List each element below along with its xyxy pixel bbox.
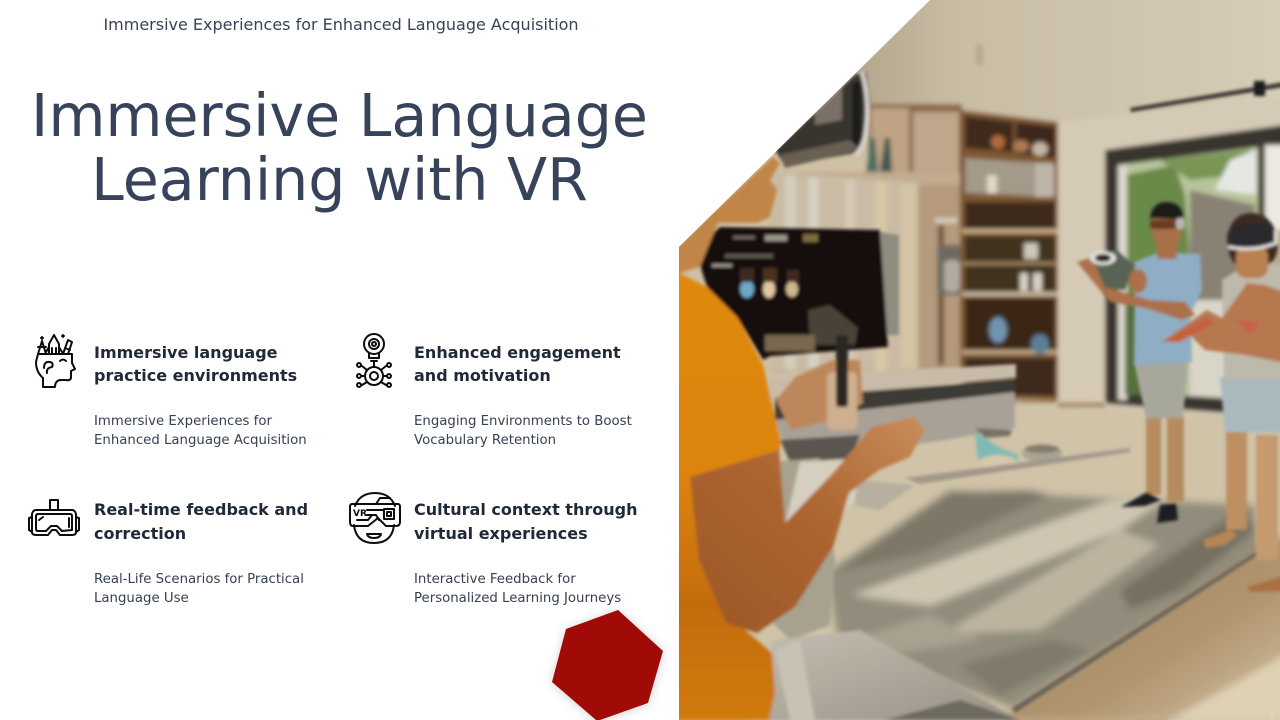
icon: face with circuit visor [349,492,401,544]
heading: virtual experiences [414,524,588,542]
panel: cultural context [349,492,637,606]
heading: Immersive language [94,343,278,362]
photo: VR language practice in a living room [679,0,1280,720]
heading [94,343,297,385]
description [94,572,304,606]
heading: Real-time feedback and [94,500,308,519]
panel: immersive environments [35,334,307,448]
floor and rug [745,400,1280,720]
heading [414,343,621,385]
description: Language Use [94,591,189,606]
description [414,572,621,606]
icon: head with creative tools [35,334,76,388]
heading [94,500,308,542]
panel: engagement and motivation [356,333,632,448]
description: Enhanced Language Acquisition [94,433,307,448]
heading: Cultural context through [414,500,637,519]
scene objects and people [660,72,1280,720]
room background [640,0,1280,720]
title [31,82,648,214]
icon: lightbulb gear and network [356,333,392,388]
icon: VR headset [28,499,80,536]
heading: Enhanced engagement [414,343,621,362]
description: Immersive Experiences for [94,414,272,429]
description: Real-Life Scenarios for Practical [94,572,304,587]
title: Learning with VR [91,146,588,214]
description [94,414,307,448]
description: Vocabulary Retention [414,433,556,448]
subtitle: Immersive Experiences for Enhanced Language Acquisition [103,15,579,34]
description: Interactive Feedback for [414,572,576,587]
description: Personalized Learning Journeys [414,591,621,606]
bottom edge backing [679,718,1280,720]
heading [414,500,637,542]
heading: practice environments [94,366,297,385]
description [414,414,632,448]
description: Engaging Environments to Boost [414,414,632,429]
title: Immersive Language [31,82,648,150]
icon: face with circuit visor: VR [353,509,367,519]
heading: and motivation [414,366,551,385]
heading: correction [94,524,186,542]
panel: real-time feedback [28,499,308,606]
